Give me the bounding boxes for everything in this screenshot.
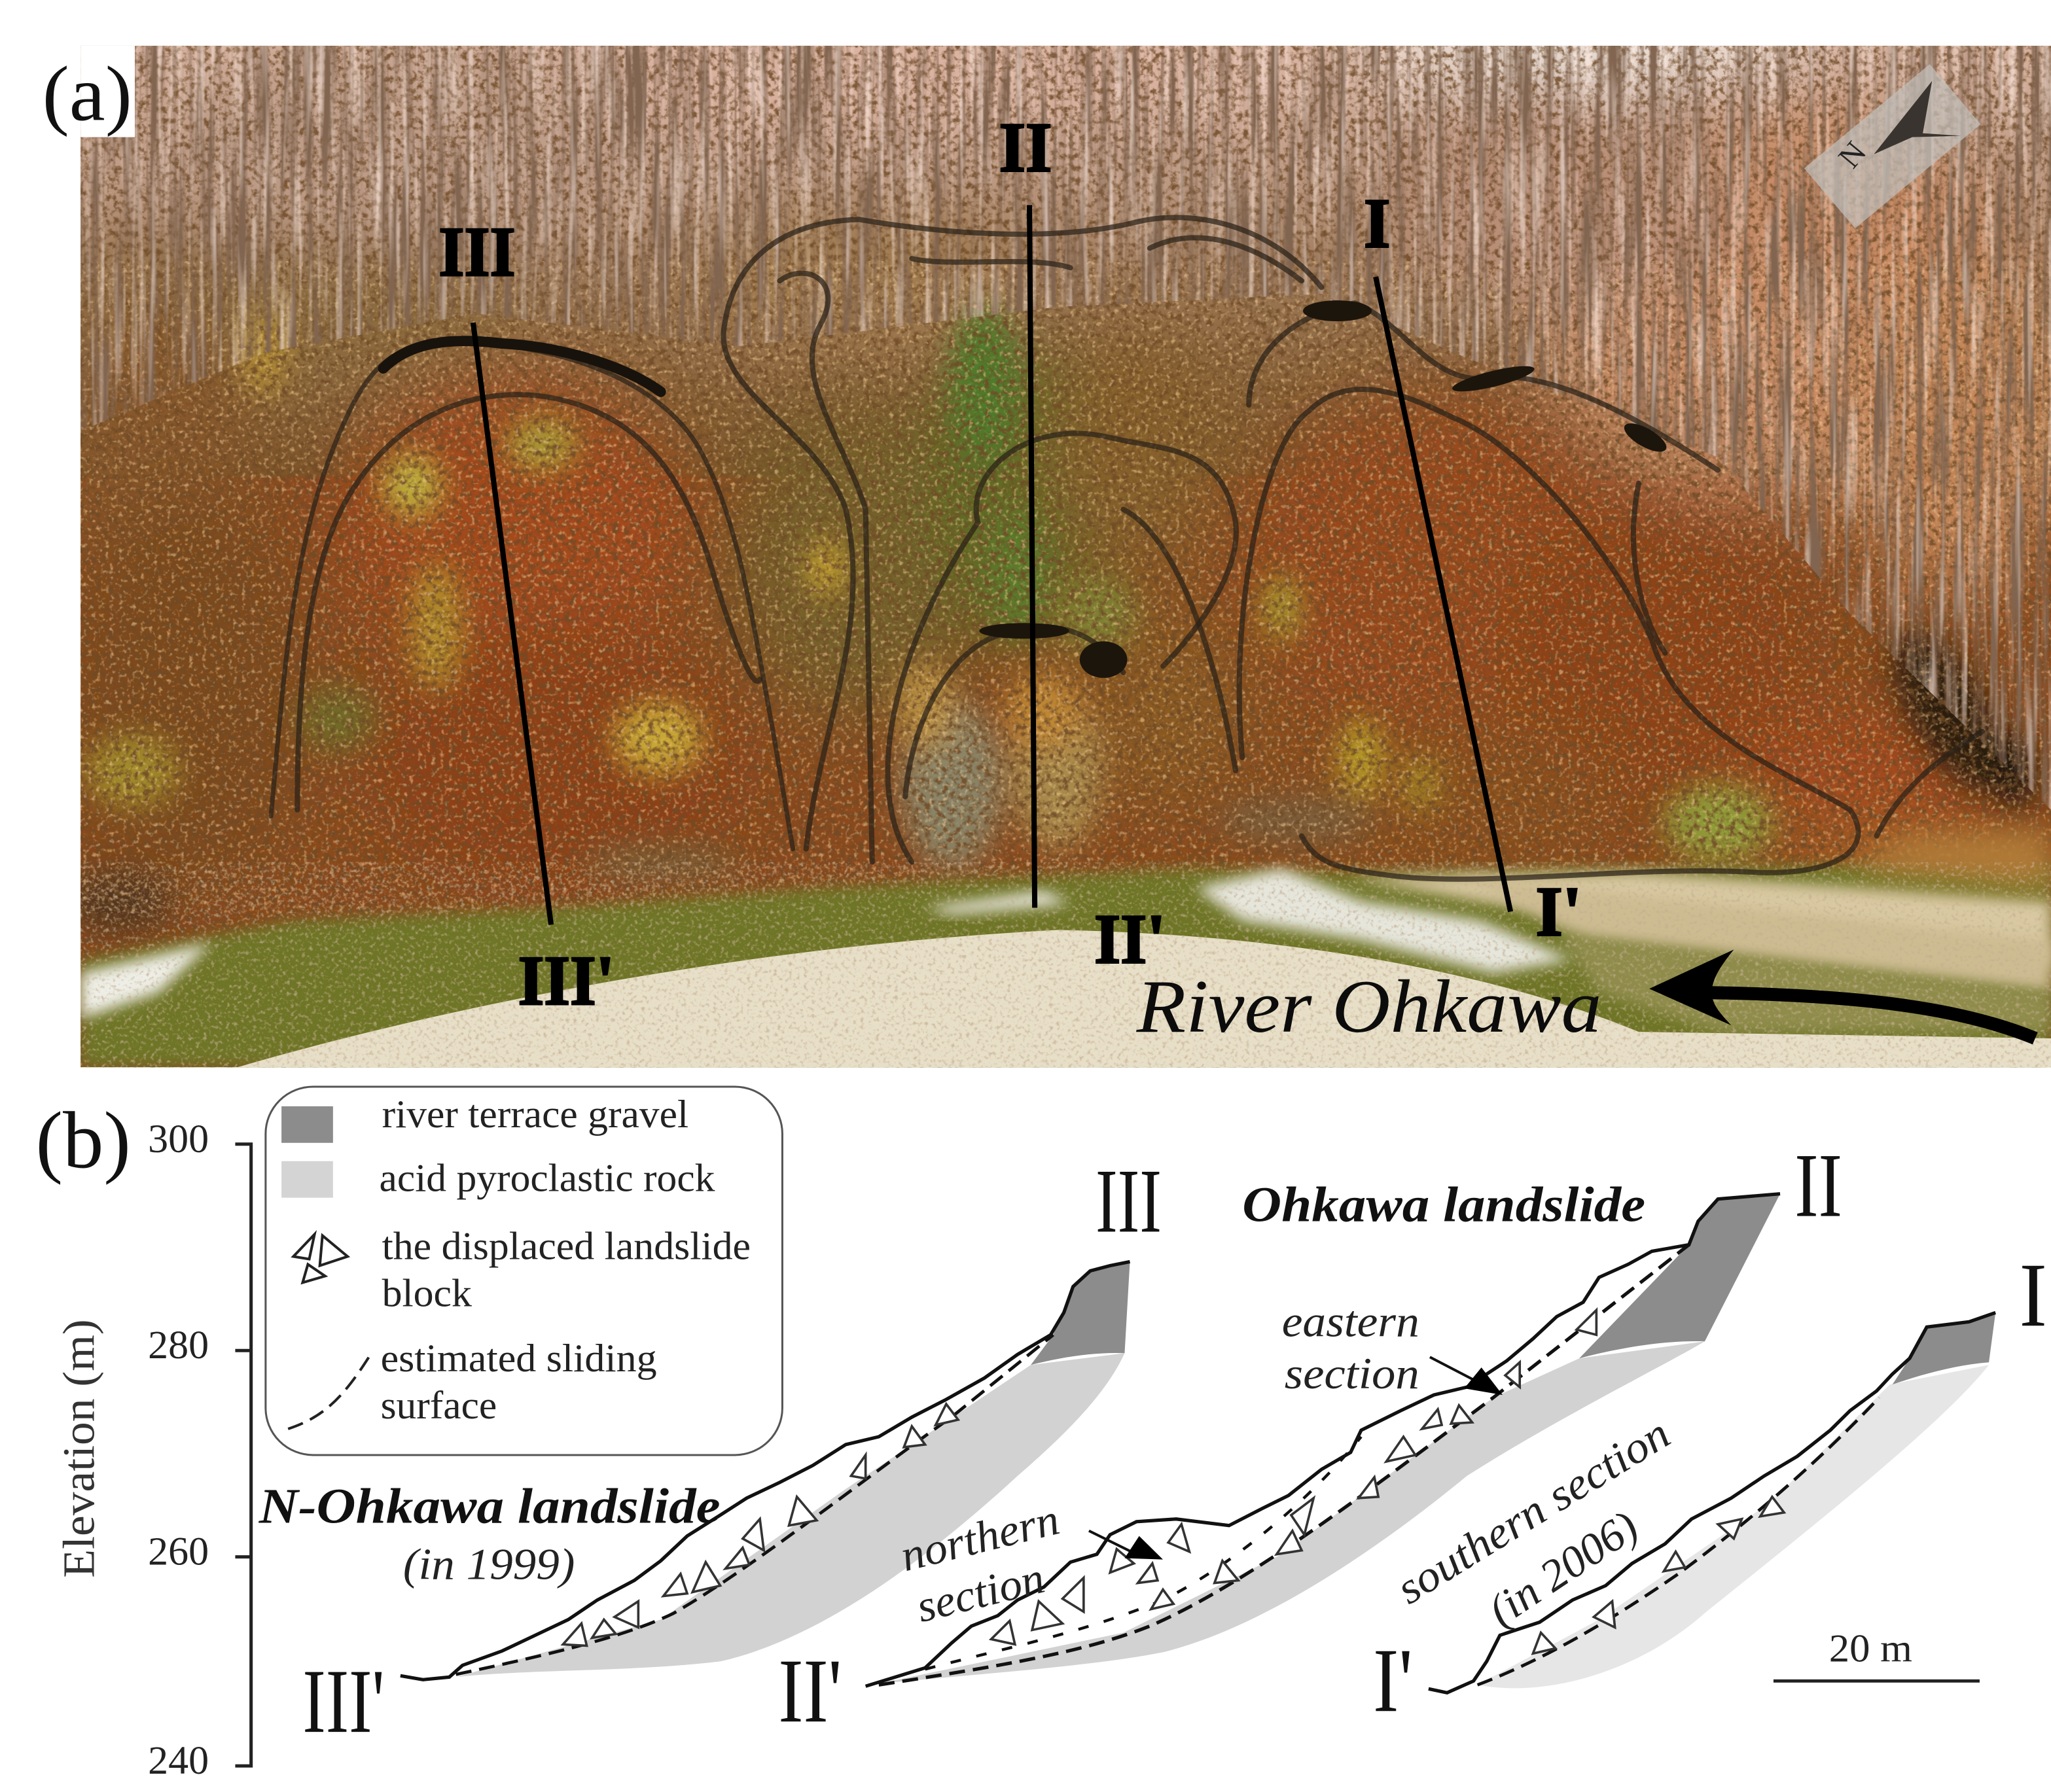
label: III: III: [1096, 1151, 1162, 1252]
legend: [266, 1087, 782, 1455]
label: northern section: northern: [895, 1494, 1064, 1581]
label: III': III': [302, 1651, 385, 1752]
photo: tree and leaf texture: [80, 46, 2051, 1067]
axis: elevation: Elevation (m): [54, 1319, 103, 1578]
panel b: cross sections: [36, 1087, 2047, 1783]
legend: acid pyroclastic rock: acid pyroclastic rock: [380, 1157, 715, 1201]
cross section III-III': [401, 1261, 1130, 1679]
legend: river terrace gravel: river terrace gravel: [382, 1093, 688, 1136]
label: River Ohkawa: River Ohkawa: [1136, 965, 1601, 1049]
label: panel (a): (a): [43, 51, 132, 138]
legend: displaced landslide block: [293, 1225, 751, 1315]
axis: elevation: 300: [148, 1117, 209, 1161]
caption: in 1999: (in 1999): [403, 1539, 575, 1589]
label: II: II: [1794, 1135, 1842, 1236]
label: eastern section: section: [1285, 1348, 1419, 1398]
arrow: eastern section: [1430, 1357, 1503, 1395]
label: II: II: [999, 109, 1052, 186]
heading: Ohkawa landslide: Ohkawa landslide: [1242, 1177, 1645, 1232]
scale bar: 20 m: 20 m: [1829, 1627, 1912, 1670]
arrow: river flow direction: [1649, 949, 2035, 1038]
legend: estimated sliding surface: [288, 1337, 657, 1429]
section line I-I': [1376, 277, 1510, 911]
legend: estimated sliding surface: estimated sliding: [381, 1337, 657, 1380]
section line III-III': [473, 323, 551, 924]
photo: river bank and gravel bar: [80, 830, 2051, 1067]
label: III': III': [518, 942, 615, 1020]
axis: elevation: 240: [148, 1738, 209, 1783]
label: II': II': [1094, 900, 1166, 978]
section line II-II': [1029, 205, 1035, 907]
axis: elevation: 260: [148, 1530, 209, 1574]
photo: dark eroded scarp pockets: [979, 300, 1671, 678]
icon: north compass: N: [1832, 135, 1873, 175]
legend: river terrace gravel: [281, 1093, 688, 1143]
legend: displaced landslide block: the displaced landslide: [382, 1225, 751, 1268]
label: panel (b): (b): [36, 1095, 131, 1186]
label: II': II': [778, 1641, 842, 1742]
photo: forest and slope background: [66, 0, 2051, 1067]
photo: dark crown scarp of N-Ohkawa landslide: [383, 341, 661, 392]
panel a: annotated photograph of the landslide slope: [66, 0, 2051, 1067]
label: southern section in 2006: (in 2006): [1479, 1501, 1647, 1636]
arrow: northern section: [1089, 1531, 1163, 1560]
label: southern section in 2006: southern section: [1387, 1408, 1679, 1613]
label: northern section: [895, 1494, 1064, 1632]
legend: estimated sliding surface: surface: [381, 1384, 497, 1428]
icon: north compass: [1804, 64, 1981, 228]
axis: elevation: [54, 1117, 251, 1783]
label: I: I: [1364, 184, 1390, 262]
axis: elevation: 280: [148, 1324, 209, 1367]
label: eastern section: eastern: [1282, 1297, 1419, 1346]
photo: mapped landslide scarps: [271, 217, 1982, 879]
label: III: III: [438, 213, 516, 291]
cross section I-I': [1429, 1312, 1995, 1693]
label: I': I': [1535, 873, 1582, 951]
heading: N-Ohkawa landslide: N-Ohkawa landslide: [259, 1479, 721, 1534]
label: I': I': [1373, 1630, 1413, 1731]
label: eastern section: [1282, 1297, 1419, 1398]
label: I: I: [2020, 1245, 2047, 1346]
label: northern section: section: [912, 1553, 1049, 1632]
legend: displaced landslide block: block: [382, 1272, 473, 1315]
cross section II-II': [866, 1194, 1780, 1686]
